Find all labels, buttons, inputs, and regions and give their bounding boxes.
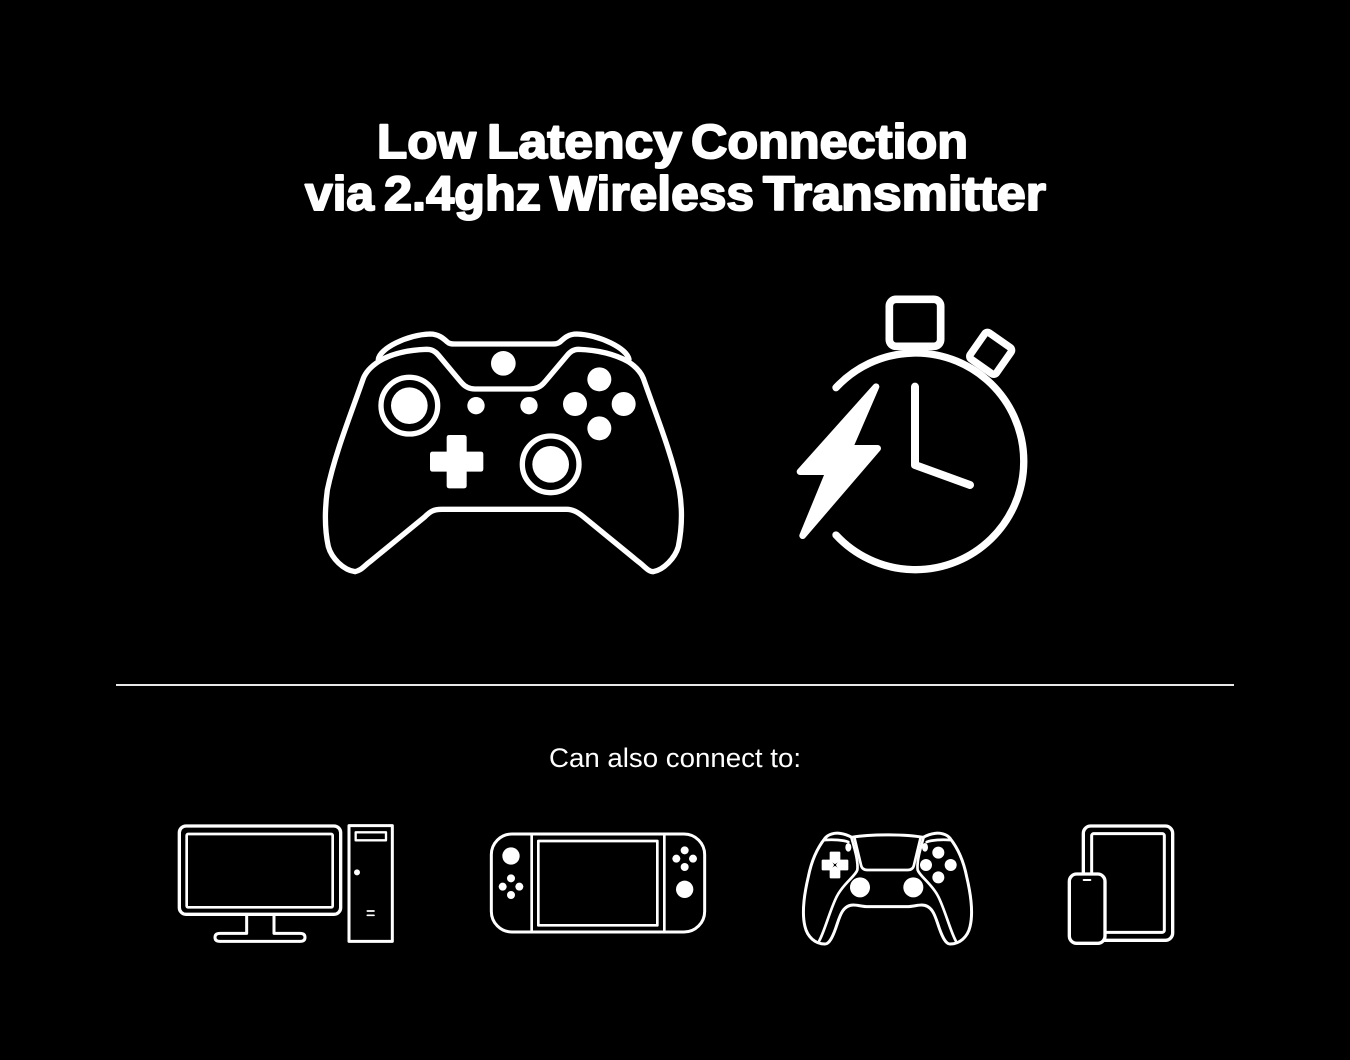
title [305,116,1046,221]
title: Low [377,116,477,169]
title: Wireless [550,168,754,221]
icon: gamepad [803,833,972,944]
icon: stopwatch with lightning bolt [800,299,1024,570]
title: Latency [487,116,682,169]
title: Transmitter [763,168,1046,221]
divider [116,684,1234,686]
icon: game controller [325,334,681,572]
icon: desktop computer [179,826,392,941]
icon: tablet and phone [1069,826,1173,943]
subheading: Can also connect to: [549,743,801,773]
title: 2.4ghz [384,168,541,221]
title: via [305,168,374,221]
title: Connection [691,116,968,169]
icon: handheld console [491,834,705,932]
